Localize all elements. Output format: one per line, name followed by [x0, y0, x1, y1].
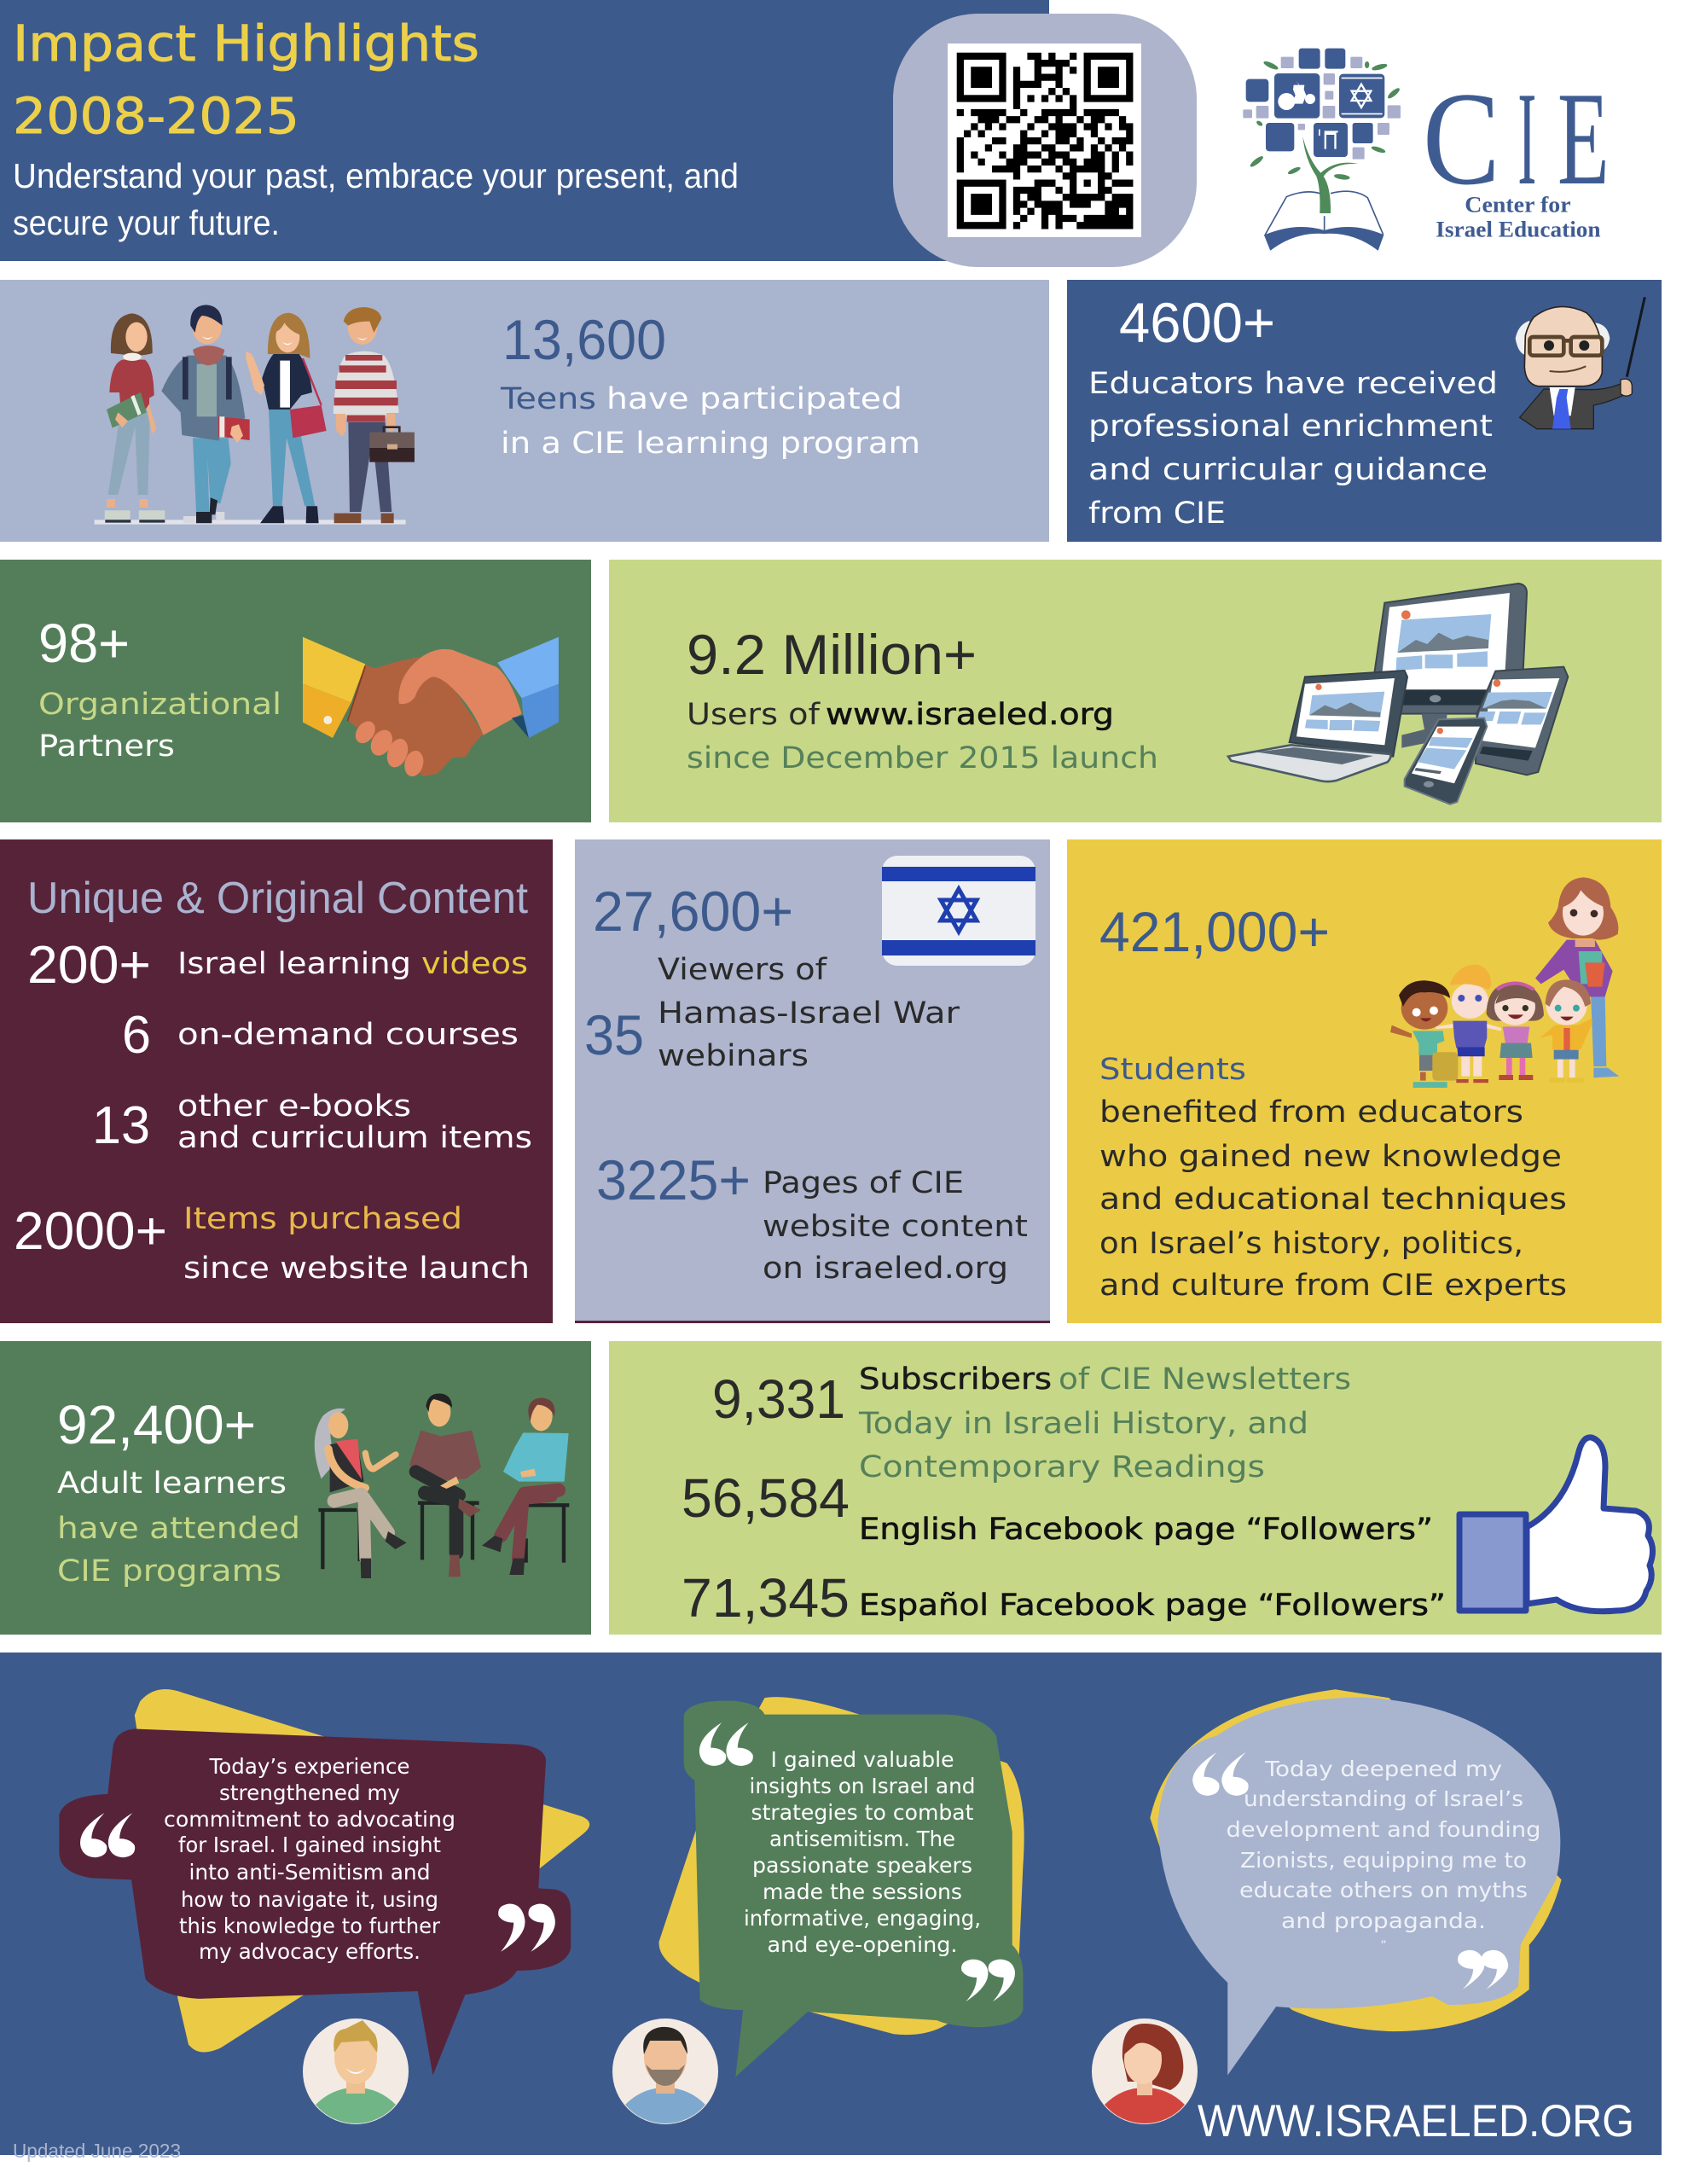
stat text: teens	[500, 382, 920, 461]
QR code panel	[893, 14, 1197, 267]
quote text: development and founding	[1227, 1817, 1540, 1842]
stat row: English Facebook	[682, 1467, 1433, 1547]
quote text: antisemitism. The	[769, 1827, 955, 1851]
stat row: e-books	[92, 1089, 532, 1155]
stat row: newsletter subscribers	[712, 1362, 1351, 1484]
testimonial two	[612, 1697, 1024, 2124]
wordmark: E	[1557, 64, 1610, 212]
stat row: newsletter subscribers: of CIE Newsletters	[1059, 1362, 1351, 1397]
avatar: red-haired woman	[1092, 2018, 1198, 2124]
stat text: users	[687, 698, 1158, 775]
stat: 421,000+: 421,000+	[1099, 900, 1330, 963]
icon: tree of tiles	[1243, 49, 1401, 250]
stat row: items purchased	[14, 1202, 530, 1286]
stat text: adults: Adult learners	[57, 1467, 287, 1501]
stat text: adults: have attended	[57, 1512, 300, 1546]
wordmark: I	[1517, 64, 1536, 212]
stat text: students: benefited from educators	[1099, 1095, 1523, 1130]
stat row: videos	[27, 936, 528, 995]
panel: webinars and pages	[575, 839, 1050, 1323]
stat row: newsletter subscribers: Contemporary Readings	[859, 1450, 1265, 1484]
panel: testimonials	[0, 1653, 1662, 2155]
stat text: educators: from CIE	[1088, 497, 1226, 531]
girl three	[246, 313, 327, 523]
panel: website users	[609, 560, 1662, 822]
stat text: educators	[1088, 367, 1498, 531]
stat text: students: Students	[1099, 1053, 1246, 1087]
shapes: yellow burst and maroon bubble	[59, 1689, 589, 2075]
stat: 27,600+: 27,600+	[593, 880, 793, 943]
stat: 9.2 Million+: 9.2 Million+	[687, 623, 977, 686]
wordmark: Israel Education	[1436, 217, 1601, 241]
stat row: newsletter subscribers: Subscribers	[859, 1362, 1052, 1397]
quote text: and propaganda.	[1281, 1908, 1486, 1933]
stat row: courses	[122, 1006, 519, 1065]
stat text: adults: CIE programs	[57, 1554, 281, 1589]
quote text: made the sessions	[763, 1879, 962, 1904]
stat text: students: who gained new knowledge	[1099, 1140, 1562, 1174]
quote text: educate others on myths	[1239, 1878, 1528, 1902]
girl one	[105, 313, 165, 523]
stat text: teens: in a CIE learning program	[501, 427, 920, 461]
quote text: understanding of Israel’s	[1244, 1786, 1523, 1811]
quote text: how to navigate it, using	[181, 1887, 438, 1912]
avatar: bearded man	[612, 2018, 718, 2124]
quote text: ”	[1380, 1939, 1387, 1953]
stat: 13,600: 13,600	[502, 308, 666, 371]
child one	[1390, 980, 1458, 1088]
stat text: partners: Partners	[38, 729, 175, 764]
stat text: adults	[57, 1467, 300, 1589]
stat row: Spanish Facebook	[682, 1567, 1446, 1629]
stat text: viewers: webinars	[658, 1039, 809, 1073]
wordmark	[1423, 64, 1610, 241]
man with teal shirt	[482, 1397, 569, 1575]
stat text: viewers: Hamas-Israel War	[658, 996, 960, 1031]
heading: Unique & Original Content	[27, 874, 529, 923]
stat text: viewers: Viewers of	[658, 953, 827, 987]
stat row: items purchased: 2000+	[14, 1202, 167, 1261]
quote text: into anti-Semitism and	[189, 1860, 430, 1885]
quote text: Zionists, equipping me to	[1240, 1848, 1527, 1873]
illustration: four teens	[95, 305, 415, 525]
stat row: English Facebook: English Facebook page “Followers”	[859, 1513, 1433, 1547]
quote text: I gained valuable	[771, 1747, 954, 1772]
stat row: newsletter subscribers: 9,331	[712, 1368, 845, 1430]
quote text: and eye-opening.	[768, 1932, 957, 1957]
quote text: insights on Israel and	[749, 1774, 976, 1798]
stat text: users: since December 2015 launch	[687, 741, 1158, 775]
stat: 92,400+: 92,400+	[57, 1394, 256, 1455]
title: 2008-2025	[13, 87, 299, 145]
boy two	[161, 305, 250, 523]
subtitle: secure your future.	[13, 203, 280, 242]
stat row: videos: videos	[421, 947, 528, 981]
man	[409, 1393, 481, 1577]
quote text: commitment to advocating	[164, 1807, 455, 1832]
boy four	[334, 307, 415, 523]
quote text: my advocacy efforts.	[199, 1939, 421, 1964]
stat row: Spanish Facebook: Español Facebook page “Followers”	[859, 1589, 1446, 1623]
stat row: English Facebook: 56,584	[682, 1467, 850, 1529]
child two	[1436, 965, 1501, 1083]
stat row: courses: 6	[122, 1006, 151, 1065]
panel: educators	[1067, 280, 1662, 542]
stat text: educators: professional enrichment	[1088, 410, 1493, 444]
stat text: students: and educational techniques	[1099, 1182, 1567, 1217]
stat row: courses: on-demand courses	[177, 1018, 519, 1052]
tablet	[1476, 667, 1568, 775]
icon: Israeli flag	[882, 856, 1035, 966]
wordmark: C	[1423, 64, 1500, 212]
stat text: pages: on israeled.org	[763, 1252, 1008, 1286]
updated note: Updated June 2023	[13, 2140, 181, 2162]
panel: adult learners	[0, 1341, 591, 1635]
icon: handshake	[303, 637, 559, 779]
stat text: viewers	[658, 953, 960, 1073]
subtitle: Understand your past, embrace your present, and	[13, 156, 739, 195]
quote text: for Israel. I gained insight	[178, 1833, 441, 1857]
phone	[1405, 718, 1487, 804]
icon: thumbs up	[1459, 1438, 1653, 1612]
stat text: partners	[38, 688, 281, 764]
stat: 4600+: 4600+	[1119, 291, 1275, 354]
wordmark: Center for	[1465, 192, 1571, 217]
quote text: informative, engaging,	[744, 1906, 981, 1931]
illustration: three seated adults	[315, 1393, 569, 1578]
stat text: pages: website content	[763, 1210, 1028, 1244]
quote text: strategies to combat	[751, 1800, 974, 1825]
stat row: e-books: and curriculum items	[177, 1121, 532, 1155]
stat text: educators: and curricular guidance	[1088, 453, 1488, 487]
stat text: users: Users of	[687, 698, 821, 732]
title	[13, 15, 479, 145]
panel: unique and original content	[0, 839, 553, 1323]
CIE logo	[1243, 49, 1610, 250]
quote text	[744, 1747, 981, 1957]
woman	[315, 1409, 407, 1578]
laptop	[1228, 671, 1407, 781]
stat text: students: and culture from CIE experts	[1099, 1269, 1567, 1303]
quote text	[164, 1754, 455, 1964]
stat text: users: www.israeled.org	[826, 698, 1114, 732]
stat: 35: 35	[584, 1003, 644, 1066]
stat text: pages: Pages of CIE	[763, 1166, 964, 1200]
panel: header	[0, 0, 1049, 261]
stat row: newsletter subscribers: Today in Israeli History, and	[858, 1407, 1308, 1441]
stat text: partners: Organizational	[38, 688, 281, 722]
shapes: yellow blob and green bubble	[659, 1697, 1024, 2077]
illustration: teacher with pointer	[1516, 297, 1644, 429]
stat text: teens: Teens	[500, 382, 596, 416]
stat: 98+: 98+	[38, 613, 130, 674]
stat text: students	[1099, 1053, 1567, 1303]
stat: 3225+: 3225+	[596, 1148, 751, 1211]
quote text: strengthened my	[219, 1780, 400, 1805]
title: Impact Highlights	[13, 15, 479, 73]
panel: teens	[0, 280, 1049, 542]
child three	[1487, 982, 1544, 1080]
stat text: students: on Israel’s history, politics,	[1099, 1227, 1523, 1261]
stat text: educators: Educators have received	[1088, 367, 1498, 401]
stat row: e-books: other e-books	[177, 1089, 411, 1124]
panel: organizational partners	[0, 560, 591, 822]
stat row: videos: 200+	[27, 936, 151, 995]
teacher	[1535, 877, 1619, 1077]
monitor	[1375, 584, 1527, 748]
panel: students	[1067, 839, 1662, 1323]
quote text: this knowledge to further	[179, 1914, 441, 1938]
stat row: items purchased: since website launch	[183, 1252, 530, 1286]
stat text: pages	[763, 1166, 1028, 1286]
quote text: Today deepened my	[1264, 1757, 1502, 1781]
testimonial three	[1092, 1689, 1562, 2124]
stat text: teens: have participated	[606, 382, 902, 416]
testimonial one	[59, 1689, 589, 2124]
stat row: videos: Israel learning	[177, 947, 411, 981]
quote text	[1227, 1757, 1540, 1953]
stat row: Spanish Facebook: 71,345	[682, 1567, 850, 1629]
quote text: passionate speakers	[752, 1853, 972, 1878]
stat row: e-books: 13	[92, 1096, 150, 1155]
quote text: Today’s experience	[209, 1754, 409, 1779]
illustration: teacher and children	[1390, 877, 1619, 1088]
subtitle	[13, 156, 739, 242]
stat row: items purchased: Items purchased	[183, 1202, 462, 1236]
child four	[1540, 979, 1592, 1083]
panel: subscribers and followers	[609, 1341, 1662, 1635]
shapes: yellow blob and lavender bubble	[1150, 1689, 1562, 2075]
avatar: blond man	[303, 2018, 409, 2124]
icon: responsive devices	[1228, 584, 1568, 804]
website URL: WWW.ISRAELED.ORG	[1198, 2096, 1634, 2146]
